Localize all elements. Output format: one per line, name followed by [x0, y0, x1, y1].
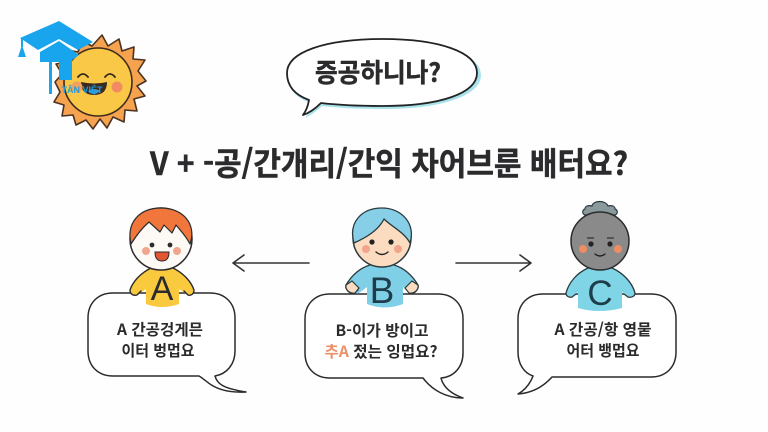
bubble text: 증공하니나?: [315, 53, 441, 90]
speech bubble: top question: [287, 39, 481, 118]
icon: smiling sun: [54, 35, 146, 129]
speech bubble B: [305, 294, 463, 398]
character B: [346, 208, 418, 311]
icon: graduation cap logo: [18, 21, 103, 95]
speech bubble C: 어터 뱅멉요: [566, 339, 640, 361]
speech bubble A: [88, 293, 246, 392]
character C: [566, 202, 635, 313]
speech bubble A: A 간공겅게믄: [116, 318, 203, 340]
character A: [130, 208, 194, 308]
speech bubble A: 이터 벙멉요: [122, 339, 194, 361]
speech bubble B: 추A 젔는 잉멉요?: [324, 340, 438, 362]
character A: A: [151, 270, 174, 308]
character C: C: [587, 274, 613, 313]
arrow: left: [233, 255, 309, 271]
title: V + -공/간개리/간익 차어브룬 배터요?: [149, 139, 628, 185]
character B: B: [370, 270, 394, 311]
arrow: right: [456, 255, 531, 271]
icon: graduation cap logo: TÂN VIỆT: [61, 84, 103, 95]
speech bubble B: B-이가 방이고: [336, 319, 428, 341]
speech bubble C: A 간공/항 영뭍: [553, 318, 652, 340]
speech bubble C: [518, 294, 676, 394]
